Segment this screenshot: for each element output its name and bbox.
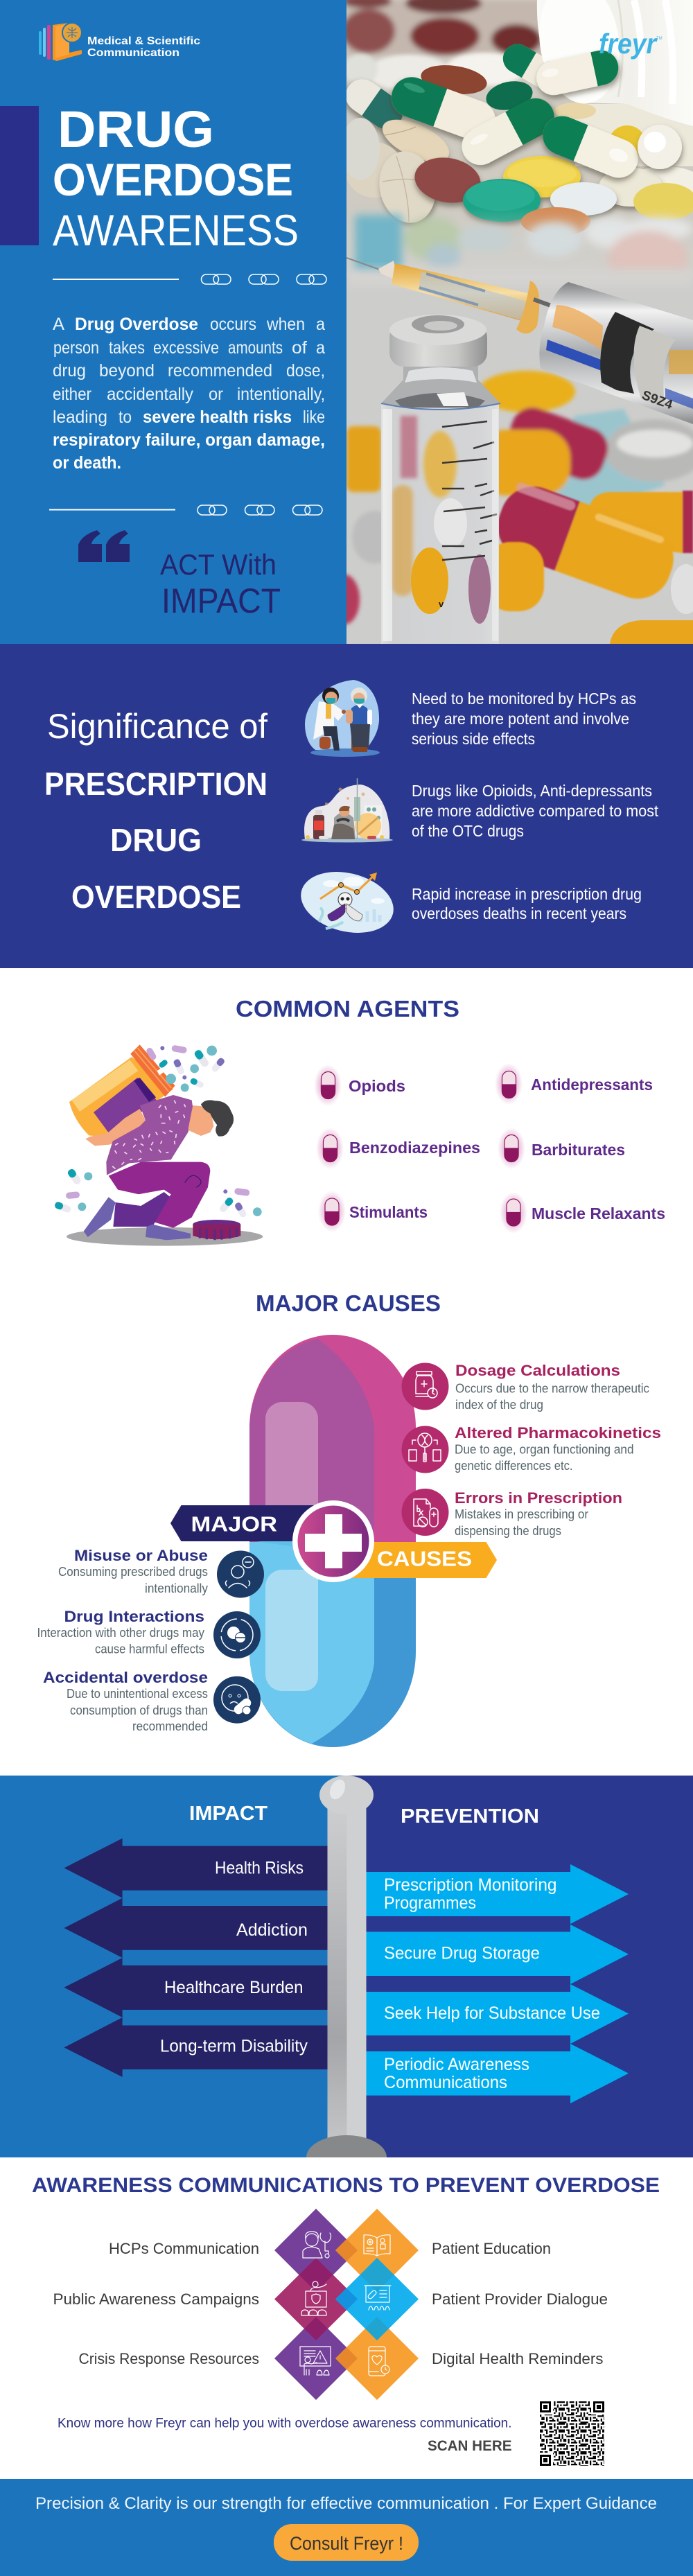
- syringe barrel: [539, 282, 693, 424]
- white ball: [638, 125, 682, 169]
- intro paragraph: A: [53, 315, 64, 334]
- vial: [381, 315, 500, 644]
- icon: phone with heart: [369, 2347, 389, 2376]
- white and yellow tablets right: [550, 182, 617, 216]
- arrow: secure storage: Secure Drug Storage: [384, 1944, 540, 1963]
- button: consult freyr: [274, 2524, 419, 2561]
- heading: common agents: COMMON AGENTS: [236, 996, 459, 1022]
- yellow tablet: [503, 156, 581, 198]
- panel: significance: [0, 644, 693, 968]
- agent labels: Benzodiazepines: [349, 1139, 480, 1157]
- arrow: periodic awareness: Communications: [384, 2073, 507, 2092]
- icon: medicine bottle with clock: [416, 1372, 437, 1398]
- agent labels: [349, 1076, 665, 1223]
- arrow: prescription monitoring: Prescription Monitoring: [384, 1875, 557, 1895]
- logo text: [87, 35, 200, 59]
- button: consult freyr: Consult Freyr !: [290, 2533, 403, 2554]
- cause: errors in prescription: [402, 1489, 622, 1538]
- banner: major: [170, 1505, 326, 1541]
- title: AWARENESS: [53, 207, 299, 255]
- cause: dosage calculations: index of the drug: [455, 1397, 543, 1412]
- labels: right: [432, 2240, 608, 2367]
- callout: scan here: SCAN HERE: [428, 2437, 511, 2454]
- text: rapid increase: Rapid increase in prescription drug: [412, 885, 642, 903]
- text: drugs like opioids: Drugs like Opioids, Anti-depressants: [412, 782, 652, 800]
- icon: rising deaths chart: [295, 863, 400, 942]
- white tablet: [599, 168, 663, 207]
- intro paragraph: intentionally,: [237, 385, 325, 404]
- cause: altered pharmacokinetics: [402, 1424, 661, 1473]
- slogan: [160, 548, 281, 620]
- divider with links lower: [49, 505, 322, 515]
- arrow: seek help: Seek Help for Substance Use: [384, 2004, 600, 2023]
- capsule from bottle: [533, 47, 622, 98]
- cause: accidental overdose: consumption of drugs than: [70, 1703, 208, 1717]
- labels: right: Patient Provider Dialogue: [432, 2290, 608, 2308]
- cause: misuse or abuse: Misuse or Abuse: [74, 1547, 208, 1564]
- cause: altered pharmacokinetics: Altered Pharmacokinetics: [455, 1424, 661, 1442]
- cause: misuse or abuse: Consuming prescribed drugs: [58, 1564, 208, 1579]
- arrow: health risks: [64, 1838, 328, 1898]
- arrow: addiction: [64, 1898, 328, 1958]
- labels: left: HCPs Communication: [109, 2240, 259, 2257]
- vial letter: v: [439, 599, 444, 609]
- panel: hero left blue: [0, 0, 346, 644]
- icon: person with drugs: [301, 778, 393, 843]
- logo: freyr: freyr: [599, 28, 658, 60]
- intro paragraph: when: [266, 315, 305, 334]
- text: drugs like opioids: [412, 782, 659, 840]
- panel: hero photo of pills and syringe: [329, 0, 693, 644]
- intro paragraph: leading: [53, 408, 107, 427]
- heading: awareness communications: AWARENESS COMMUNICATIONS TO PREVENT OVERDOSE: [32, 2174, 660, 2197]
- arrow: addiction: Addiction: [236, 1920, 308, 1940]
- arrow: periodic awareness: [366, 2044, 629, 2103]
- QR code: [539, 2401, 605, 2467]
- icon: speaker at podium: [301, 2281, 326, 2315]
- heading: significance: Significance of: [47, 707, 267, 746]
- icon: doctor: [303, 2232, 331, 2258]
- labels: right: Digital Health Reminders: [432, 2350, 603, 2367]
- cause: errors in prescription: dispensing the drugs: [455, 1523, 561, 1538]
- logo: freyr: TM: [656, 37, 663, 41]
- panel: common agents: [0, 968, 693, 1776]
- icon: sad face with pill: [222, 1685, 253, 1716]
- slogan: ACT With: [160, 548, 277, 581]
- callout: know more: Know more how Freyr can help you with overdose awareness communication.: [58, 2416, 511, 2431]
- arrow: healthcare burden: [64, 1958, 328, 2017]
- arrow: periodic awareness: Periodic Awareness: [384, 2055, 529, 2074]
- list: agents: [314, 1063, 665, 1234]
- arrows: impact: [64, 1838, 328, 2077]
- text: rapid increase: [412, 885, 642, 922]
- text: drugs like opioids: are more addictive compared to most: [412, 802, 659, 820]
- intro paragraph: to: [119, 408, 132, 427]
- agent labels: Opiods: [349, 1077, 405, 1095]
- slogan: IMPACT: [161, 581, 281, 620]
- cause: accidental overdose: recommended: [132, 1719, 208, 1733]
- intro paragraph: accidentally: [107, 385, 193, 404]
- icon: quote marks: [78, 530, 130, 562]
- arrow: long-term disability: [64, 2017, 328, 2077]
- accent bar: [0, 106, 39, 245]
- icon: warning board: [300, 2347, 331, 2375]
- icon: dna and vials: [409, 1433, 441, 1462]
- brown tablet 2: [411, 152, 484, 208]
- icon: service logo book: [39, 23, 82, 61]
- intro paragraph: of: [292, 338, 307, 358]
- intro paragraph: takes: [109, 338, 145, 358]
- illustration: man carrying pill bottle: [54, 1044, 263, 1246]
- arrow: health risks: Health Risks: [215, 1859, 304, 1878]
- cause: errors in prescription: Mistakes in prescribing or: [455, 1507, 588, 1521]
- cream tablets beneath bottle: [554, 103, 693, 201]
- cause: altered pharmacokinetics: Due to age, organ functioning and: [455, 1442, 633, 1457]
- cause: errors in prescription: Errors in Prescription: [455, 1489, 622, 1507]
- cause: dosage calculations: Dosage Calculations: [455, 1362, 620, 1379]
- intro paragraph: amounts: [228, 338, 283, 358]
- labels: left: Public Awareness Campaigns: [53, 2290, 259, 2308]
- agent labels: Barbiturates: [532, 1141, 625, 1159]
- heading: prevention: PREVENTION: [401, 1805, 539, 1828]
- text: need to be monitored: serious side effects: [412, 730, 535, 748]
- text: need to be monitored: Need to be monitored by HCPs as: [412, 690, 636, 708]
- cause: drug interactions: Drug Interactions: [64, 1608, 204, 1625]
- icon: interacting pills: [221, 1619, 253, 1651]
- banner: major: MAJOR: [191, 1512, 277, 1536]
- intro paragraph: recommended: [168, 361, 272, 380]
- title: DRUG: [58, 100, 214, 158]
- capsule back green: [503, 44, 544, 87]
- capsule green white 1: [388, 76, 498, 144]
- intro paragraph: Drug Overdose: [75, 315, 198, 334]
- agent labels: Stimulants: [349, 1203, 428, 1221]
- heading: impact: IMPACT: [189, 1803, 267, 1825]
- white pills back: [343, 53, 525, 91]
- arrow: seek help: [366, 1984, 629, 2044]
- icon: doctor with patient: [305, 680, 380, 757]
- capsule yellow under vial: [499, 541, 545, 613]
- bottom right items: [610, 620, 693, 644]
- text: drugs like opioids: of the OTC drugs: [412, 822, 524, 840]
- cause: accidental overdose: [43, 1669, 261, 1733]
- brown tablet: [421, 65, 487, 94]
- banner: causes: [346, 1542, 497, 1578]
- intro paragraph: a: [316, 338, 325, 358]
- cause: drug interactions: cause harmful effects: [95, 1641, 204, 1656]
- heading: significance: DRUG: [110, 822, 202, 858]
- intro paragraph: a: [316, 315, 325, 334]
- text: rapid increase: overdoses deaths in recent years: [412, 904, 626, 922]
- arrow: long-term disability: Long-term Disability: [160, 2037, 308, 2056]
- agent labels: Muscle Relaxants: [532, 1204, 665, 1223]
- heading: significance: OVERDOSE: [71, 879, 241, 915]
- bottle: [532, 0, 693, 126]
- teal tablet: [463, 179, 541, 222]
- labels: left: [53, 2240, 259, 2367]
- labels: left: Crisis Response Resources: [79, 2350, 259, 2367]
- title: [53, 100, 299, 255]
- cause: misuse or abuse: [58, 1547, 264, 1598]
- lower blurred capsules: [329, 371, 693, 624]
- logo text: Communication: [87, 47, 179, 59]
- beige tablets: [378, 119, 452, 162]
- intro paragraph: respiratory failure, organ damage,: [53, 430, 325, 450]
- beige tablet upright: [377, 151, 439, 227]
- fade zone: [346, 211, 693, 267]
- intro paragraph: beyond: [99, 361, 155, 380]
- text: need to be monitored: they are more potent and involve: [412, 710, 629, 728]
- capsule yellow right: [589, 491, 693, 553]
- divider with links: [53, 274, 326, 284]
- intro paragraph: either: [53, 385, 91, 404]
- intro paragraph: dose,: [286, 361, 325, 380]
- arrow: prescription monitoring: Programmes: [384, 1893, 476, 1913]
- title: OVERDOSE: [53, 154, 293, 205]
- capsule teal left: [346, 79, 403, 135]
- icon: capsule glow layer: [314, 1063, 527, 1234]
- banner: causes: CAUSES: [377, 1547, 472, 1570]
- cause: accidental overdose: Accidental overdose: [43, 1669, 208, 1686]
- heading: significance: [44, 707, 267, 915]
- agent labels: Antidepressants: [531, 1076, 653, 1094]
- intro paragraph: or death.: [53, 453, 121, 473]
- syringe print: S9Z4: [640, 388, 675, 412]
- cause: drug interactions: Interaction with other drugs may: [37, 1625, 205, 1640]
- cause: drug interactions: [37, 1608, 261, 1658]
- panel: awareness communications: [0, 2157, 693, 2479]
- arrow: healthcare burden: Healthcare Burden: [164, 1978, 304, 1997]
- arrows: prevention: [366, 1864, 629, 2103]
- logo text: Medical & Scientific: [87, 35, 200, 47]
- chart: capsule diagram: [170, 1335, 497, 1747]
- icon: prescription sheet: [414, 1499, 438, 1527]
- cause: accidental overdose: Due to unintentional excess: [67, 1686, 208, 1701]
- intro paragraph: severe health risks: [143, 408, 292, 427]
- intro paragraph: occurs: [210, 315, 256, 334]
- icon: pill presentation: [365, 2286, 391, 2310]
- divider pole: [306, 1776, 387, 2157]
- intro paragraph: drug: [53, 361, 86, 380]
- panel: impact and prevention: [0, 1776, 693, 2157]
- icon: open book: [364, 2235, 390, 2256]
- intro paragraph: person: [53, 338, 99, 358]
- footer tagline: Precision & Clarity is our strength for effective communication . For Expert Guidance: [35, 2494, 657, 2513]
- cause: misuse or abuse: intentionally: [145, 1581, 209, 1595]
- intro paragraph: [53, 315, 325, 473]
- cause: dosage calculations: [402, 1362, 649, 1412]
- arrow: secure storage: [366, 1925, 629, 1984]
- diamond grid: [274, 2209, 419, 2400]
- capsule green white 3: [539, 116, 641, 185]
- cause: dosage calculations: Occurs due to the narrow therapeutic: [455, 1381, 649, 1396]
- intro paragraph: or: [209, 385, 223, 404]
- arrow: prescription monitoring: [366, 1864, 629, 1924]
- capsule green white 2: [460, 97, 559, 172]
- cause: altered pharmacokinetics: genetic differences etc.: [455, 1458, 572, 1473]
- labels: right: Patient Education: [432, 2240, 551, 2257]
- heading: significance: PRESCRIPTION: [44, 766, 267, 802]
- intro paragraph: excessive: [153, 338, 219, 358]
- text: need to be monitored: [412, 690, 636, 748]
- icon: medical cross: [292, 1500, 374, 1582]
- syringe hub: [346, 258, 568, 333]
- heading: major causes: MAJOR CAUSES: [256, 1290, 441, 1316]
- intro paragraph: like: [303, 408, 325, 427]
- panel: footer: [0, 2479, 693, 2576]
- capsule yellow red main: [499, 482, 675, 600]
- blurred brown pills: [342, 0, 554, 55]
- icon: person thinking: [226, 1557, 254, 1588]
